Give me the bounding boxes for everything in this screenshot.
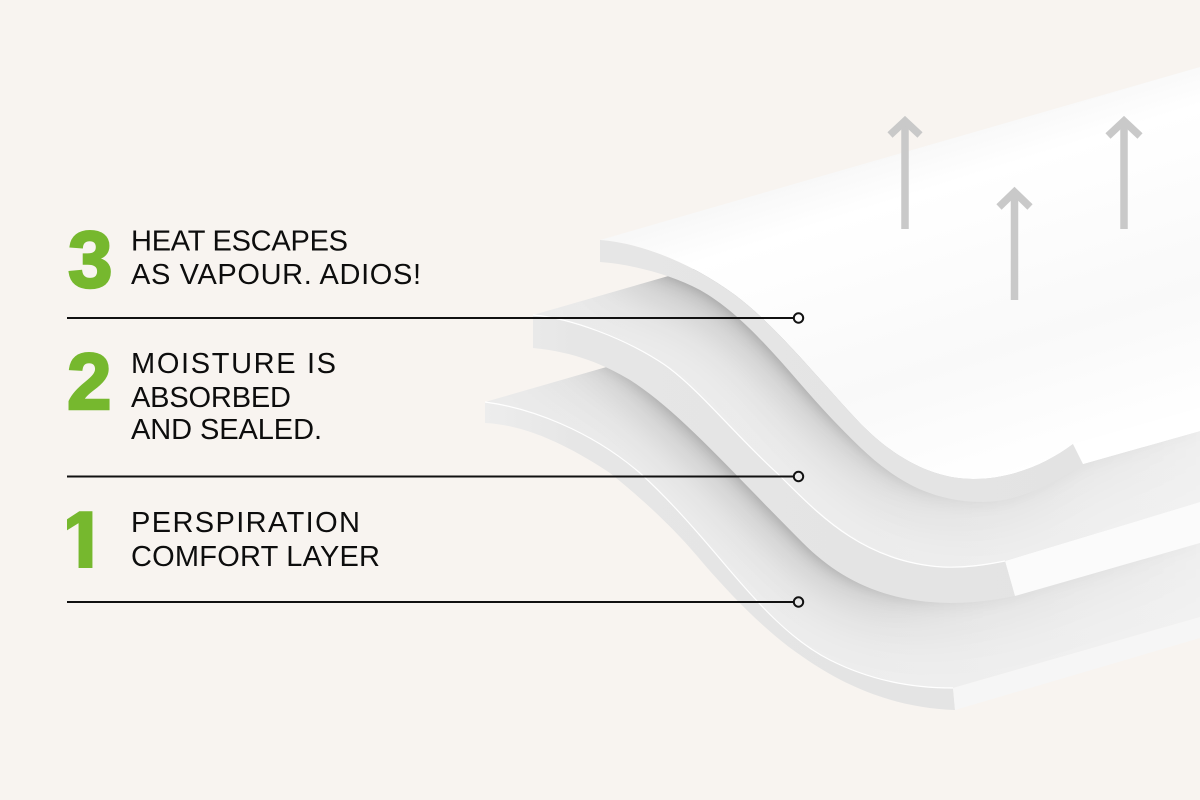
bottom fabric layer	[485, 367, 1200, 710]
arrow: vapour centre	[999, 192, 1030, 300]
step 1: perspiration comfort layer	[67, 511, 378, 568]
top fabric layer	[600, 67, 1200, 502]
middle fabric layer	[533, 269, 1200, 603]
leader line: layer 2	[67, 472, 803, 481]
leader line: layer 3	[67, 313, 803, 323]
step 2: moisture absorbed: ABSORBED	[131, 382, 291, 414]
step 3: heat escapes: AS VAPOUR. ADIOS!	[131, 259, 421, 291]
infographic: layered fabric diagram	[67, 67, 1200, 710]
step 2: moisture absorbed: MOISTURE IS	[131, 348, 336, 380]
step 3: heat escapes: HEAT ESCAPES	[131, 226, 348, 258]
step 1: perspiration comfort layer: COMFORT LAYER	[131, 541, 380, 573]
arrow: vapour left	[890, 121, 920, 229]
arrow: vapour right	[1108, 121, 1140, 229]
step 1: perspiration comfort layer: 1	[55, 491, 111, 603]
step 3: heat escapes	[68, 215, 421, 304]
step 2: moisture absorbed: 2	[67, 337, 112, 426]
step 2: moisture absorbed	[67, 337, 336, 446]
leader line: layer 1	[67, 597, 803, 607]
step 3: heat escapes: 3	[68, 215, 112, 304]
step 1: perspiration comfort layer: PERSPIRATION	[131, 507, 360, 539]
step 2: moisture absorbed: AND SEALED.	[131, 414, 322, 446]
